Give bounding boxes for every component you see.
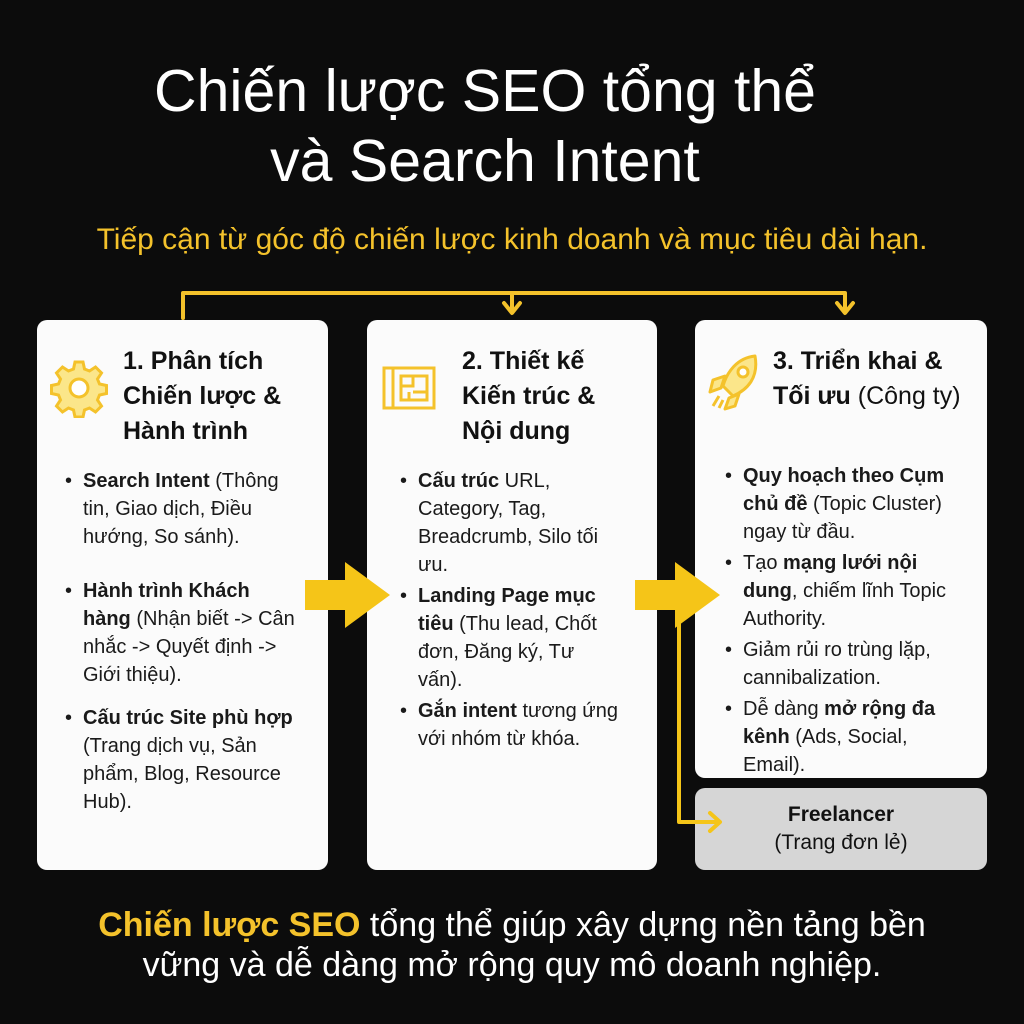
bullet list: đơn, Đăng ký, Tư	[418, 641, 574, 663]
bullet list: ưu.	[418, 554, 448, 576]
bullet list: Tạo mạng lưới nội	[743, 552, 917, 574]
heading	[123, 347, 281, 445]
heading: Chiến lược &	[123, 382, 281, 410]
bullet list: Authority.	[743, 608, 826, 630]
panel: freelancer: (Trang đơn lẻ)	[774, 831, 908, 854]
heading: 1. Phân tích	[123, 347, 263, 375]
bullet list: Hành trình Khách	[83, 580, 250, 602]
bottom summary: vững và dễ dàng mở rộng quy mô doanh nghiệp.	[143, 946, 881, 984]
bullet list: kênh (Ads, Social,	[743, 726, 908, 748]
bullet list: Landing Page mục	[418, 585, 596, 607]
bullet list: ngay từ đầu.	[743, 521, 855, 543]
heading: Hành trình	[123, 417, 248, 445]
bullet list: vấn).	[418, 669, 462, 691]
bullet list: Quy hoạch theo Cụm	[743, 465, 944, 487]
bullet list: Search Intent (Thông	[83, 470, 279, 492]
bullet list	[400, 470, 618, 750]
bullet list: Cấu trúc Site phù hợp	[83, 707, 293, 729]
panel: card 1	[37, 320, 328, 870]
bullet list: phẩm, Blog, Resource	[83, 763, 281, 785]
title: và Search Intent	[270, 128, 700, 194]
heading	[462, 347, 595, 445]
bottom summary	[98, 906, 926, 984]
bullet list: với nhóm từ khóa.	[418, 728, 580, 750]
icon: gear	[50, 360, 108, 418]
bullet list: Breadcrumb, Silo tối	[418, 526, 598, 548]
bullet list: dung, chiếm lĩnh Topic	[743, 580, 946, 602]
heading	[773, 347, 961, 410]
title	[154, 58, 816, 194]
bullet list: hướng, So sánh).	[83, 526, 240, 548]
heading: Nội dung	[462, 417, 570, 445]
panel: card 2	[367, 320, 657, 870]
heading: Tối ưu (Công ty)	[773, 382, 961, 410]
bullet list: Giảm rủi ro trùng lặp,	[743, 639, 931, 661]
bullet list: tin, Giao dịch, Điều	[83, 498, 252, 520]
panel: card 3	[695, 320, 987, 778]
bullet list: Giới thiệu).	[83, 664, 182, 686]
heading: Kiến trúc &	[462, 382, 595, 410]
heading: 3. Triển khai &	[773, 347, 943, 375]
icon: rocket	[708, 354, 758, 410]
bullet list: nhắc -> Quyết định ->	[83, 636, 276, 658]
bullet list: Hub).	[83, 791, 132, 813]
panel: freelancer	[695, 788, 987, 870]
title: Chiến lược SEO tổng thể	[154, 58, 816, 124]
bullet list	[66, 470, 295, 813]
bullet list: (Trang dịch vụ, Sản	[83, 735, 257, 757]
bullet list: cannibalization.	[743, 667, 881, 689]
bottom summary: Chiến lược SEO tổng thể giúp xây dựng nền tảng bền	[98, 906, 926, 944]
bullet list	[726, 465, 946, 776]
icon: blueprint	[382, 366, 436, 410]
bullet list: tiêu (Thu lead, Chốt	[418, 613, 597, 635]
bullet list: Category, Tag,	[418, 498, 546, 520]
heading: 2. Thiết kế	[462, 347, 584, 375]
bullet list: hàng (Nhận biết -> Cân	[83, 608, 295, 630]
bullet list: Gắn intent tương ứng	[418, 700, 618, 722]
bullet list: Dễ dàng mở rộng đa	[743, 698, 935, 720]
bullet list: chủ đề (Topic Cluster)	[743, 493, 942, 515]
panel: freelancer: Freelancer	[788, 803, 894, 826]
subtitle: Tiếp cận từ góc độ chiến lược kinh doanh và mục tiêu dài hạn.	[97, 223, 927, 256]
bullet list: Email).	[743, 754, 805, 776]
bullet list: Cấu trúc URL,	[418, 470, 550, 492]
